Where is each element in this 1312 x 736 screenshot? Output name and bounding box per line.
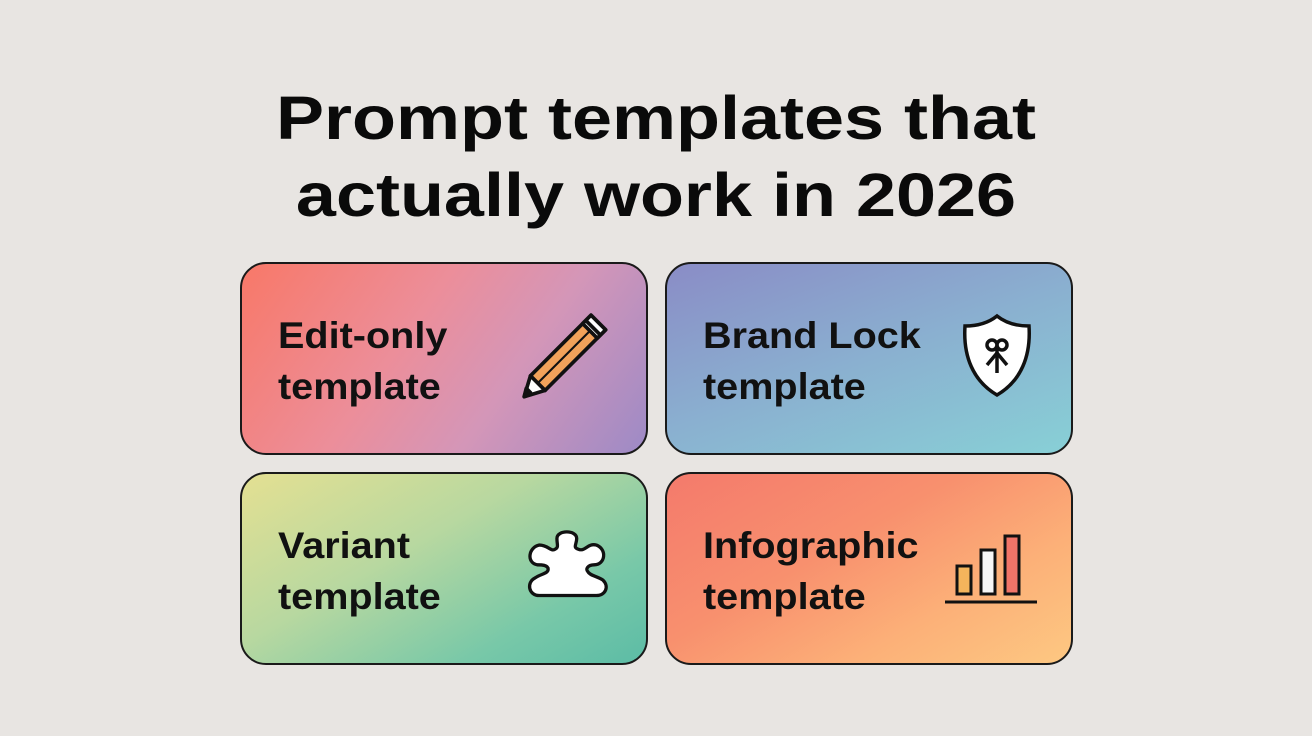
icon: puzzle bbox=[528, 530, 608, 598]
text: brand lock: template bbox=[703, 366, 866, 407]
panel: variant bbox=[240, 472, 648, 665]
panel: brand lock bbox=[665, 262, 1073, 455]
text: infographic bbox=[703, 525, 919, 617]
title bbox=[276, 84, 1036, 229]
text: edit-only bbox=[278, 315, 448, 407]
text: infographic: Infographic bbox=[703, 525, 919, 566]
text: variant bbox=[278, 525, 441, 617]
text: infographic: template bbox=[703, 576, 866, 617]
title: actually work in 2026 bbox=[296, 161, 1016, 229]
icon: bar chart bbox=[945, 534, 1037, 604]
text: variant: template bbox=[278, 576, 441, 617]
title: Prompt templates that bbox=[276, 84, 1036, 152]
panel: infographic bbox=[665, 472, 1073, 665]
text: brand lock bbox=[703, 315, 921, 407]
icon: shield bbox=[963, 314, 1031, 397]
text: edit-only: Edit-only bbox=[278, 315, 447, 356]
icon: pencil bbox=[522, 313, 608, 399]
text: brand lock: Brand Lock bbox=[703, 315, 921, 356]
panel: edit-only bbox=[240, 262, 648, 455]
text: edit-only: template bbox=[278, 366, 441, 407]
text: variant: Variant bbox=[278, 525, 410, 566]
